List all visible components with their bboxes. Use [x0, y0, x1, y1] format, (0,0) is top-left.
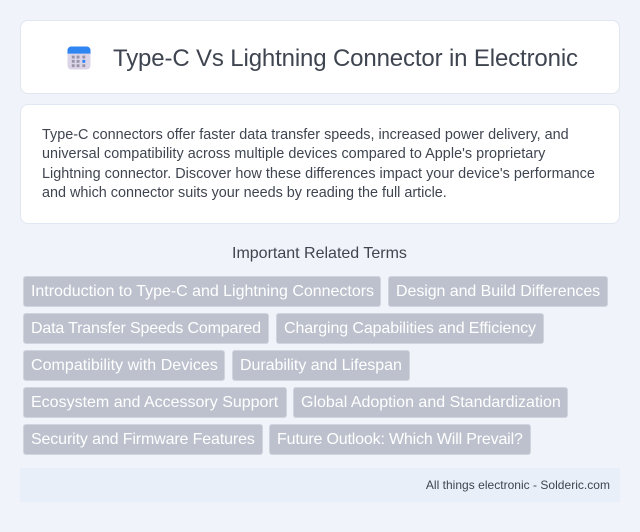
title: Type-C Vs Lightning Connector in Electronic — [113, 45, 578, 72]
footer text: All things electronic - Solderic.com — [426, 478, 610, 492]
chip: Future Outlook: Which Will Prevail? — [277, 431, 523, 448]
chip — [23, 424, 263, 455]
summary card — [20, 104, 620, 224]
chip: Compatibility with Devices — [31, 357, 218, 374]
header card — [20, 20, 620, 94]
summary text: and which connector suits your needs by reading the full article. — [42, 185, 447, 201]
chip: Charging Capabilities and Efficiency — [284, 320, 536, 337]
summary text: universal compatibility across multiple devices compared to Apple's proprietary — [42, 146, 545, 162]
chip — [23, 350, 225, 381]
chip — [293, 387, 568, 418]
chip: Security and Firmware Features — [31, 431, 255, 448]
chip — [388, 276, 608, 307]
icon: calendar — [67, 46, 91, 70]
chip — [23, 313, 269, 344]
summary text: Lightning connector. Discover how these differences impact your device's performance — [42, 166, 595, 182]
footer bar — [20, 468, 620, 502]
chip: Introduction to Type-C and Lightning Connectors — [31, 283, 374, 300]
summary text — [42, 127, 595, 201]
chip: Durability and Lifespan — [240, 357, 402, 374]
chip — [269, 424, 531, 455]
chip — [23, 276, 381, 307]
chip: Global Adoption and Standardization — [301, 394, 561, 411]
chip: Design and Build Differences — [396, 283, 600, 300]
summary text: Type-C connectors offer faster data transfer speeds, increased power delivery, and — [42, 127, 569, 143]
chip — [232, 350, 410, 381]
chip: Ecosystem and Accessory Support — [31, 394, 278, 411]
chip — [276, 313, 544, 344]
term chips — [23, 276, 608, 455]
heading: related terms: Important Related Terms — [232, 245, 407, 262]
chip — [23, 387, 287, 418]
chip: Data Transfer Speeds Compared — [31, 320, 261, 337]
